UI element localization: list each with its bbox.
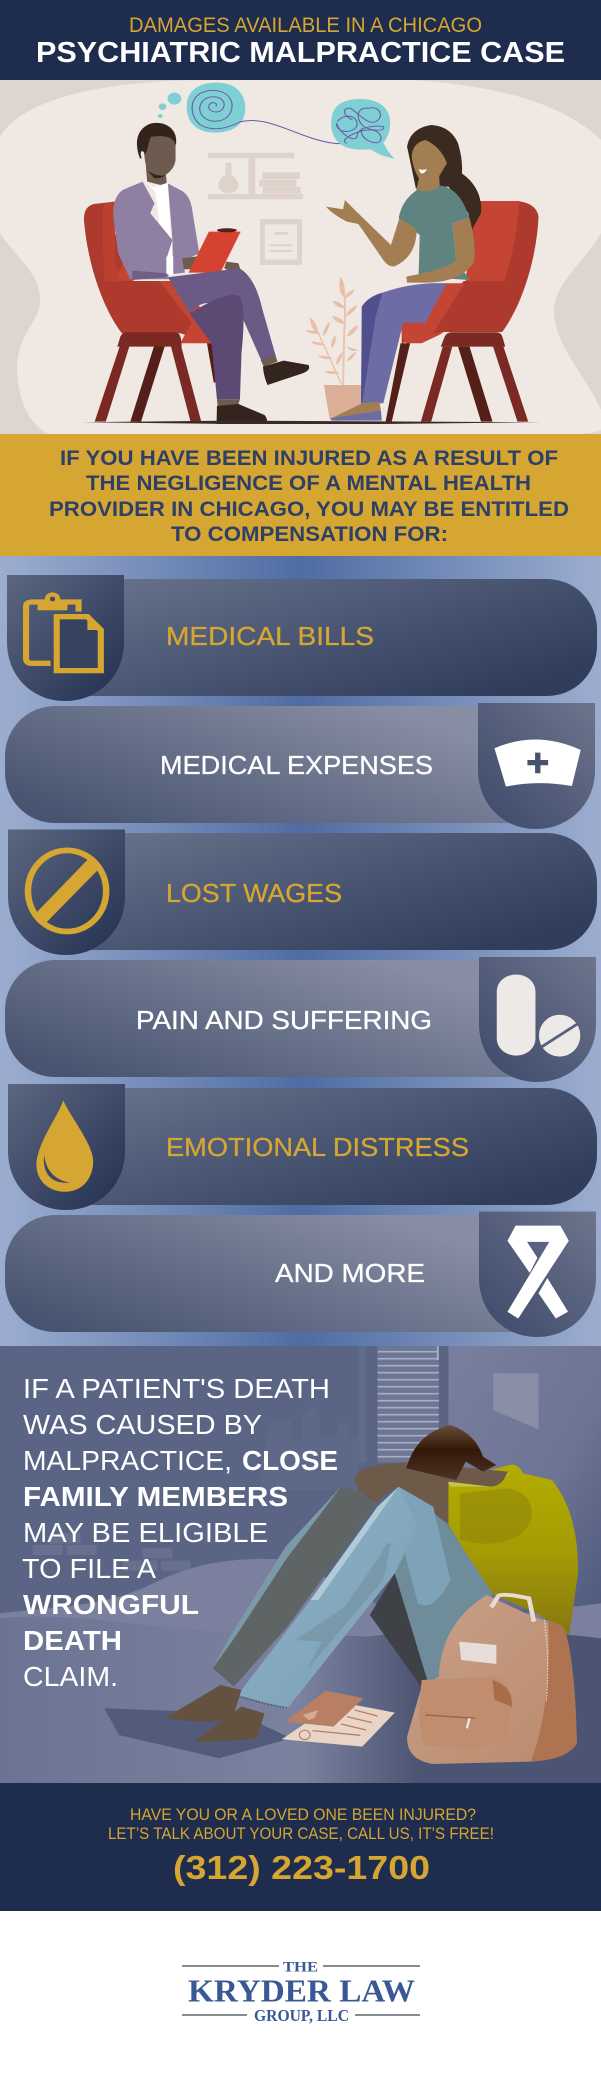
call to action footer: LET’S TALK ABOUT YOUR CASE, CALL US, IT’S FREE! <box>108 1825 494 1843</box>
list item: medical bills <box>7 575 597 701</box>
icon: medicine pills <box>497 974 580 1057</box>
list item: medical bills: MEDICAL BILLS <box>166 621 374 651</box>
wrongful death message: IF A PATIENT'S DEATH <box>23 1373 330 1404</box>
call to action footer <box>0 1783 601 1911</box>
icon: prohibition sign <box>28 850 106 932</box>
wrongful death message: CLAIM. <box>23 1661 118 1692</box>
list item: emotional distress <box>8 1084 597 1210</box>
scattered papers <box>282 1691 395 1747</box>
wrongful death message: WRONGFUL <box>23 1589 199 1620</box>
intro text: TO COMPENSATION FOR: <box>171 522 448 546</box>
floor line <box>82 421 542 424</box>
list item: medical expenses: MEDICAL EXPENSES <box>160 750 433 780</box>
panel: wrongful death scene <box>0 1346 601 1783</box>
wrongful death message: DEATH <box>23 1625 122 1656</box>
icon: awareness ribbon <box>507 1226 569 1319</box>
list item: emotional distress: EMOTIONAL DISTRESS <box>166 1132 469 1162</box>
call to action text: HAVE YOU OR A LOVED ONE BEEN INJURED? <box>130 1806 476 1824</box>
floor shadow <box>104 1708 291 1758</box>
icon: clipboard with document <box>26 592 101 671</box>
wrongful death message: TO FILE A <box>22 1553 157 1584</box>
wrongful death message: MALPRACTICE, <box>23 1445 232 1476</box>
logo: The Kryder Law Group <box>0 1911 601 2073</box>
list item: and more <box>5 1212 596 1337</box>
connecting thread <box>240 120 345 144</box>
icon: tear drop <box>36 1101 93 1192</box>
list item: pain and suffering <box>5 957 596 1082</box>
therapist figure <box>113 123 309 424</box>
header banner <box>0 0 601 80</box>
gold intro band <box>0 434 601 556</box>
list item: and more: AND MORE <box>275 1258 425 1288</box>
grieving person <box>168 1425 578 1742</box>
logo: The Kryder Law Group: THE <box>283 1960 318 1976</box>
wrongful death message: FAMILY MEMBERS <box>23 1481 288 1512</box>
list item: lost wages: LOST WAGES <box>166 878 342 908</box>
phone number: (312) 223-1700 <box>173 1849 430 1886</box>
wall certificate <box>260 219 302 265</box>
wrongful death message: MAY BE ELIGIBLE <box>23 1517 268 1548</box>
header line: damages available: DAMAGES AVAILABLE IN A CHICAGO <box>129 14 482 37</box>
thought bubble: spiral <box>158 83 245 133</box>
wrongful death message <box>22 1373 338 1692</box>
intro text: IF YOU HAVE BEEN INJURED AS A RESULT OF <box>60 446 558 470</box>
right armchair <box>386 201 539 422</box>
floor and hill <box>0 1559 601 1783</box>
wrongful death message: WAS CAUSED BY <box>23 1409 262 1440</box>
potted plant <box>305 278 362 419</box>
shelf <box>208 153 303 199</box>
background blob <box>0 80 601 434</box>
backpack <box>407 1595 577 1764</box>
icon: nurse cap <box>494 740 581 787</box>
panel: compensation list <box>0 556 601 1346</box>
logo: The Kryder Law Group: KRYDER LAW <box>188 1972 415 2008</box>
wrongful death message: CLOSE <box>242 1445 338 1476</box>
logo: The Kryder Law Group: GROUP, LLC <box>254 2006 349 2025</box>
intro text: PROVIDER IN CHICAGO, YOU MAY BE ENTITLED <box>49 497 569 521</box>
illustration: therapy session <box>0 80 601 434</box>
list item: medical expenses <box>5 703 595 829</box>
intro text <box>49 446 569 546</box>
client figure <box>326 125 481 421</box>
left armchair <box>84 202 217 422</box>
window and back wall <box>33 1346 601 1609</box>
list item: pain and suffering: PAIN AND SUFFERING <box>136 1005 432 1035</box>
title: PSYCHIATRIC MALPRACTICE CASE <box>36 37 565 69</box>
list item: lost wages <box>8 830 597 955</box>
intro text: THE NEGLIGENCE OF A MENTAL HEALTH <box>86 471 531 495</box>
speech bubble: tangle <box>331 99 395 159</box>
